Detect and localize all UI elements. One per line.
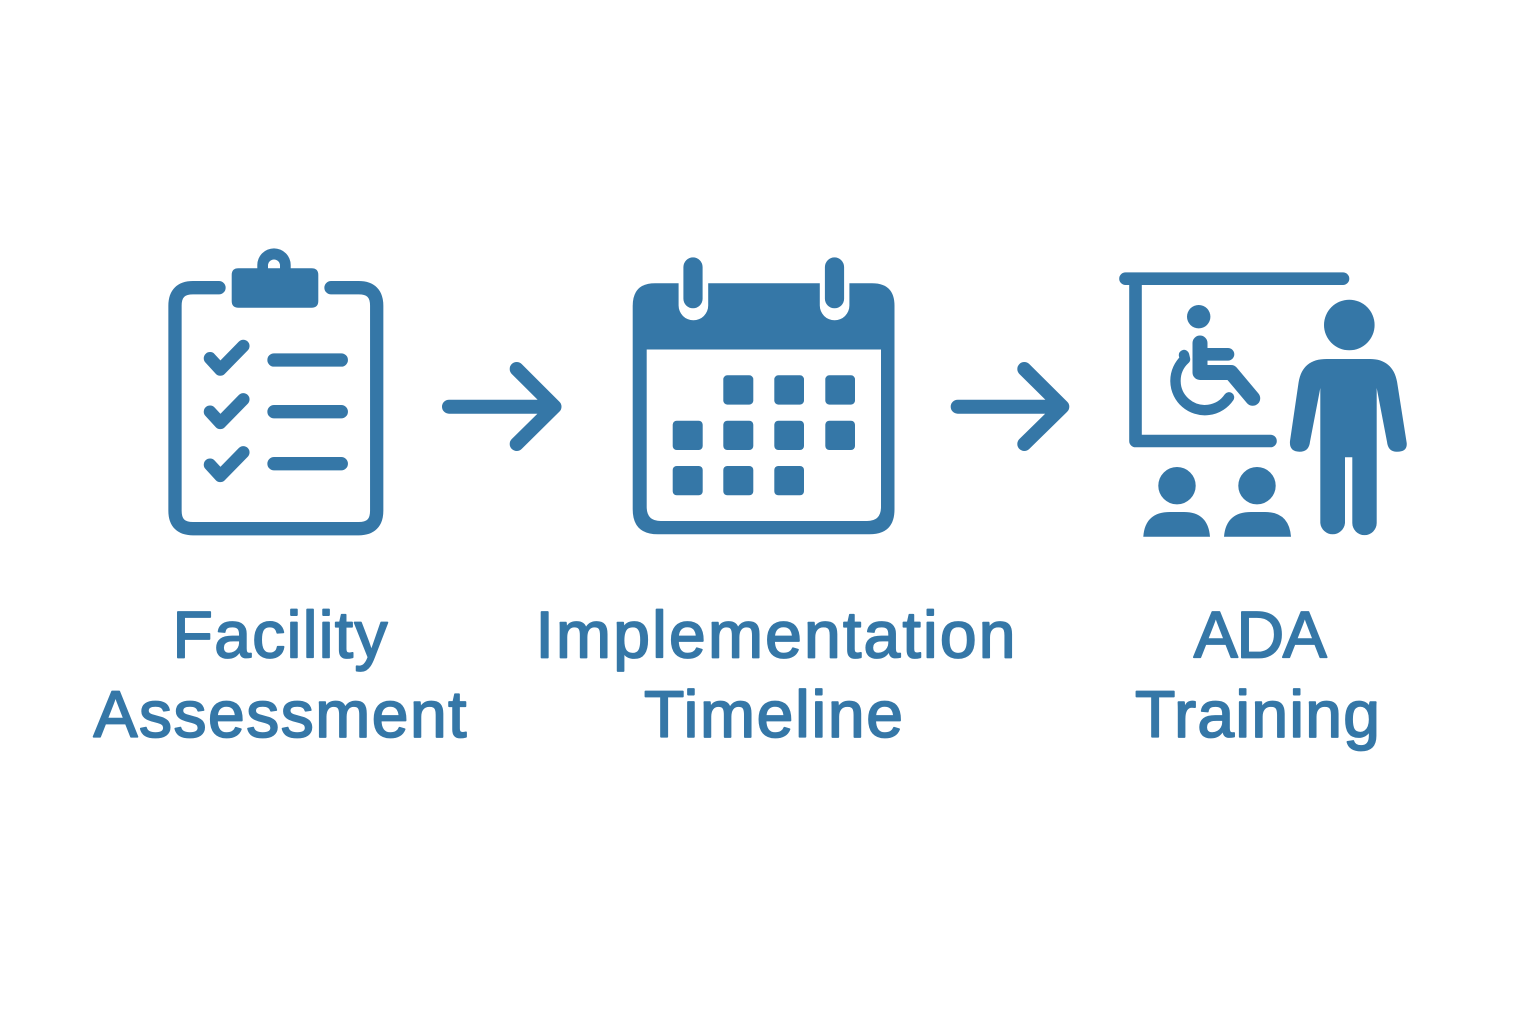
label: Implementation Timeline xyxy=(536,598,1016,751)
check marks xyxy=(210,346,243,476)
clipboard clip xyxy=(232,248,318,308)
audience member right xyxy=(1224,467,1291,537)
checklist lines xyxy=(274,360,341,464)
audience member left xyxy=(1143,467,1210,537)
icon: ADA training presenter xyxy=(1126,279,1407,537)
label: Facility Assessment xyxy=(94,598,466,751)
clipboard outline xyxy=(175,288,377,529)
presenter figure xyxy=(1290,300,1407,535)
icon: calendar xyxy=(633,267,894,534)
label: Facility Assessment: Assessment xyxy=(94,677,466,751)
label: ADA Training: ADA xyxy=(1194,598,1327,672)
label: Implementation Timeline: Implementation xyxy=(536,598,1016,672)
label: ADA Training xyxy=(1135,598,1380,751)
arrow: timeline to training xyxy=(958,369,1062,444)
icon: clipboard checklist xyxy=(175,248,377,529)
calendar day cells xyxy=(673,375,855,495)
arrow: assessment to timeline xyxy=(449,369,554,444)
label: Implementation Timeline: Timeline xyxy=(644,677,903,751)
wheelchair symbol xyxy=(1175,305,1253,410)
label: ADA Training: Training xyxy=(1135,677,1380,751)
label: Facility Assessment: Facility xyxy=(172,598,388,672)
presentation board xyxy=(1126,279,1343,441)
